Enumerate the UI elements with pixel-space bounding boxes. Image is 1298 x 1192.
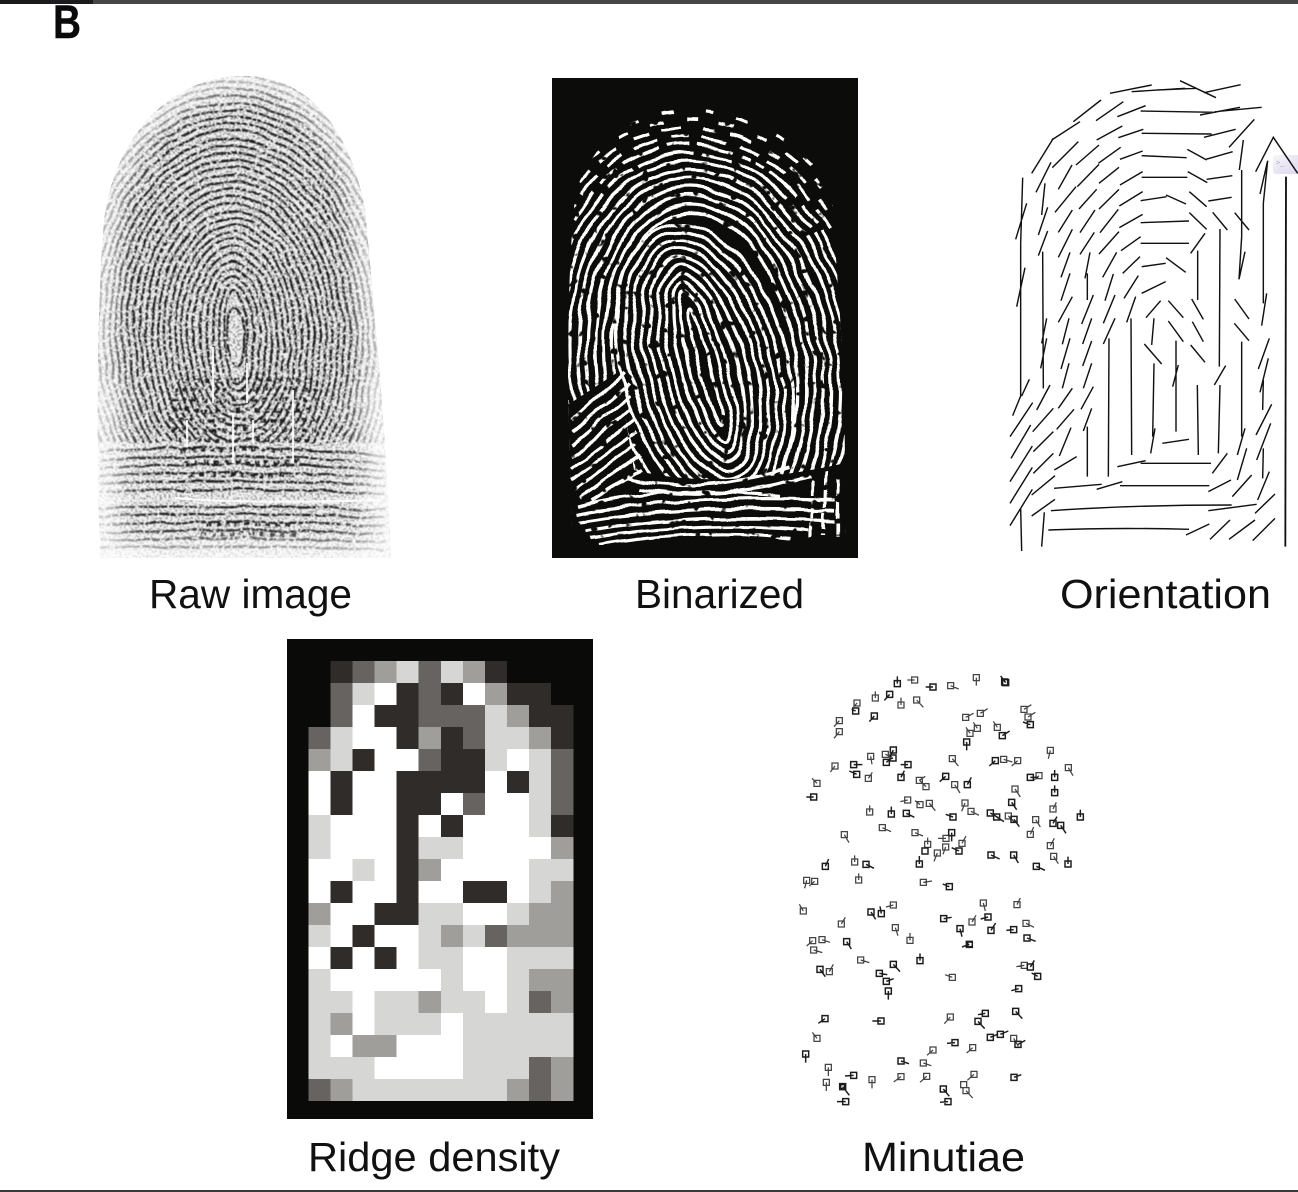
- lower dark blotches: [170, 380, 320, 535]
- icon: small floating tooltip: [1273, 155, 1298, 174]
- caption: orientation: Orientation: [1060, 571, 1271, 617]
- minutiae: lower half: [799, 898, 1041, 1105]
- caption: minutiae: Minutiae: [862, 1134, 1025, 1180]
- panel: binarized fingerprint: [552, 78, 858, 558]
- minutiae: upper half: [804, 675, 1083, 890]
- caption: raw image: Raw image: [149, 571, 352, 617]
- panel: orientation field: [1010, 81, 1298, 551]
- bottom window strip: [0, 1190, 1298, 1192]
- mask: lower-left and base zones: [568, 373, 846, 545]
- panel: raw fingerprint image: [98, 76, 391, 558]
- caption: ridge density: Ridge density: [308, 1134, 560, 1180]
- top window strip: [0, 0, 1298, 4]
- panel: ridge density map: [287, 639, 593, 1119]
- icon: small floating tooltip: >_: [1276, 160, 1284, 167]
- panel: minutiae map: [799, 675, 1083, 1105]
- caption: binarized: Binarized: [635, 571, 804, 617]
